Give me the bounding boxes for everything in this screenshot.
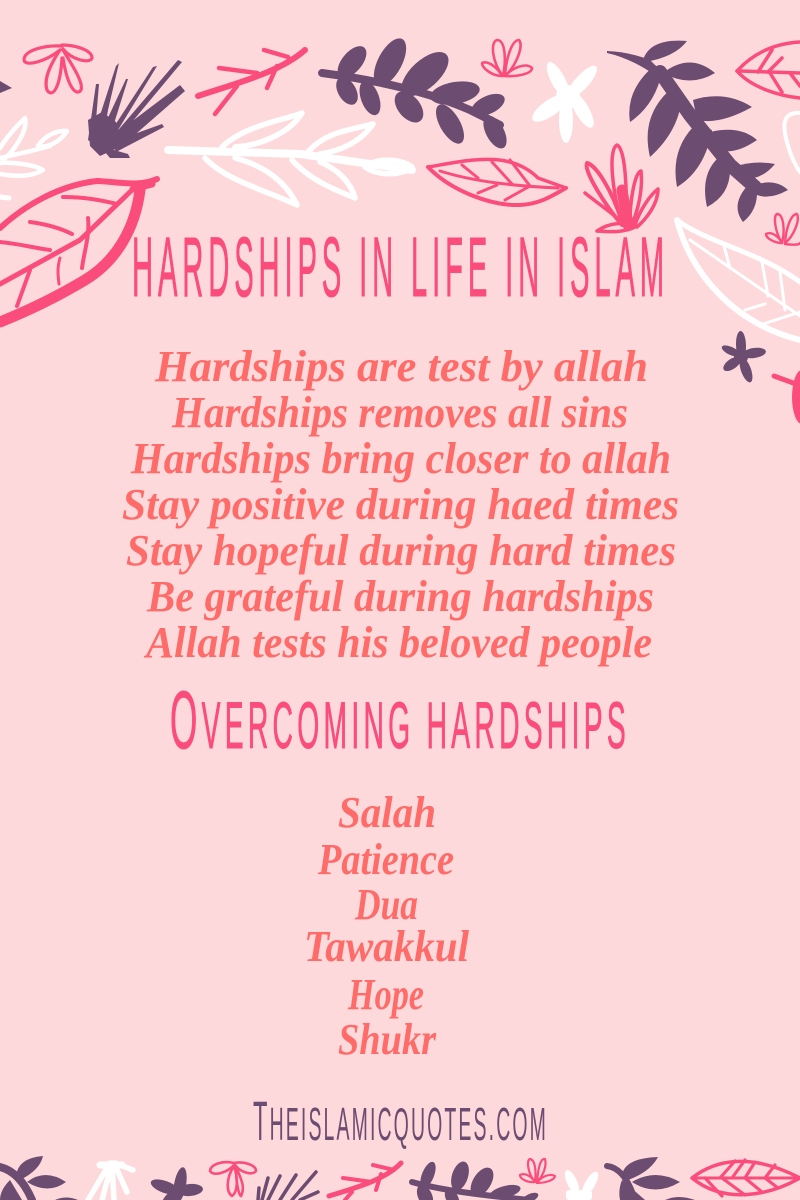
list of hardship reasons: Stay hopeful during hard times [126,526,676,575]
icon: pink plant [585,145,658,232]
icon: small pink outline flower, top centre [482,40,532,76]
icon: large pink leaf, left [0,179,157,322]
icon: pink twig [198,50,305,114]
list of ways to overcome hardship [304,788,470,1064]
icon: purple leaf tip, far left [0,81,12,93]
list of hardship reasons: Be grateful during hardships [146,572,654,621]
bottom border: purple branch right [607,1157,695,1200]
bottom border: purple branch [412,1159,540,1200]
icon: purple spiky plant [88,60,185,158]
list of hardship reasons: Hardships bring closer to allah [130,434,671,483]
list of ways to overcome hardship: Hope [347,970,424,1019]
list of ways to overcome hardship: Dua [354,880,418,929]
icon: purple leafy branch [322,33,511,152]
list of hardship reasons: Allah tests his beloved people [143,618,652,667]
bottom border: purple spikes [258,1172,318,1200]
icon: large purple branch, top right [607,41,788,222]
icon: pink outline flower, top left [24,45,92,93]
bottom border: pink flower [210,1162,256,1196]
bottom border: pink leaf [692,1160,800,1196]
bottom border: white fan [88,1163,133,1200]
bottom border: pink twig [329,1163,401,1200]
list of hardship reasons: Stay positive during haed times [122,480,679,529]
icon: purple star flower, right [720,331,767,384]
icon: white leaves, far left [0,118,67,198]
icon: pink leaf, top right corner [737,42,800,98]
icon: white star flower [528,59,601,143]
bottom border: purple branch left [0,1156,78,1200]
list of hardship reasons [122,342,679,667]
bottom border: white star [562,1168,601,1200]
icon: large white leaf, right [677,220,800,340]
list of ways to overcome hardship: Shukr [338,1015,437,1064]
list of hardship reasons: Hardships removes all sins [171,388,628,437]
bottom border: purple star [149,1166,203,1200]
list of ways to overcome hardship: Salah [338,788,436,837]
list of ways to overcome hardship: Tawakkul [304,922,470,971]
icon: white branch [168,113,412,205]
list of hardship reasons: Hardships are test by allah [154,342,648,391]
icon: pink outline leaf, centre [428,159,566,205]
icon: pink bud, right edge [774,370,800,424]
bottom border: small pink flower [520,1159,555,1183]
icon: white leaf edge, right [784,113,800,172]
list of ways to overcome hardship: Patience [317,835,454,884]
icon: small pink flower, right [766,214,800,245]
